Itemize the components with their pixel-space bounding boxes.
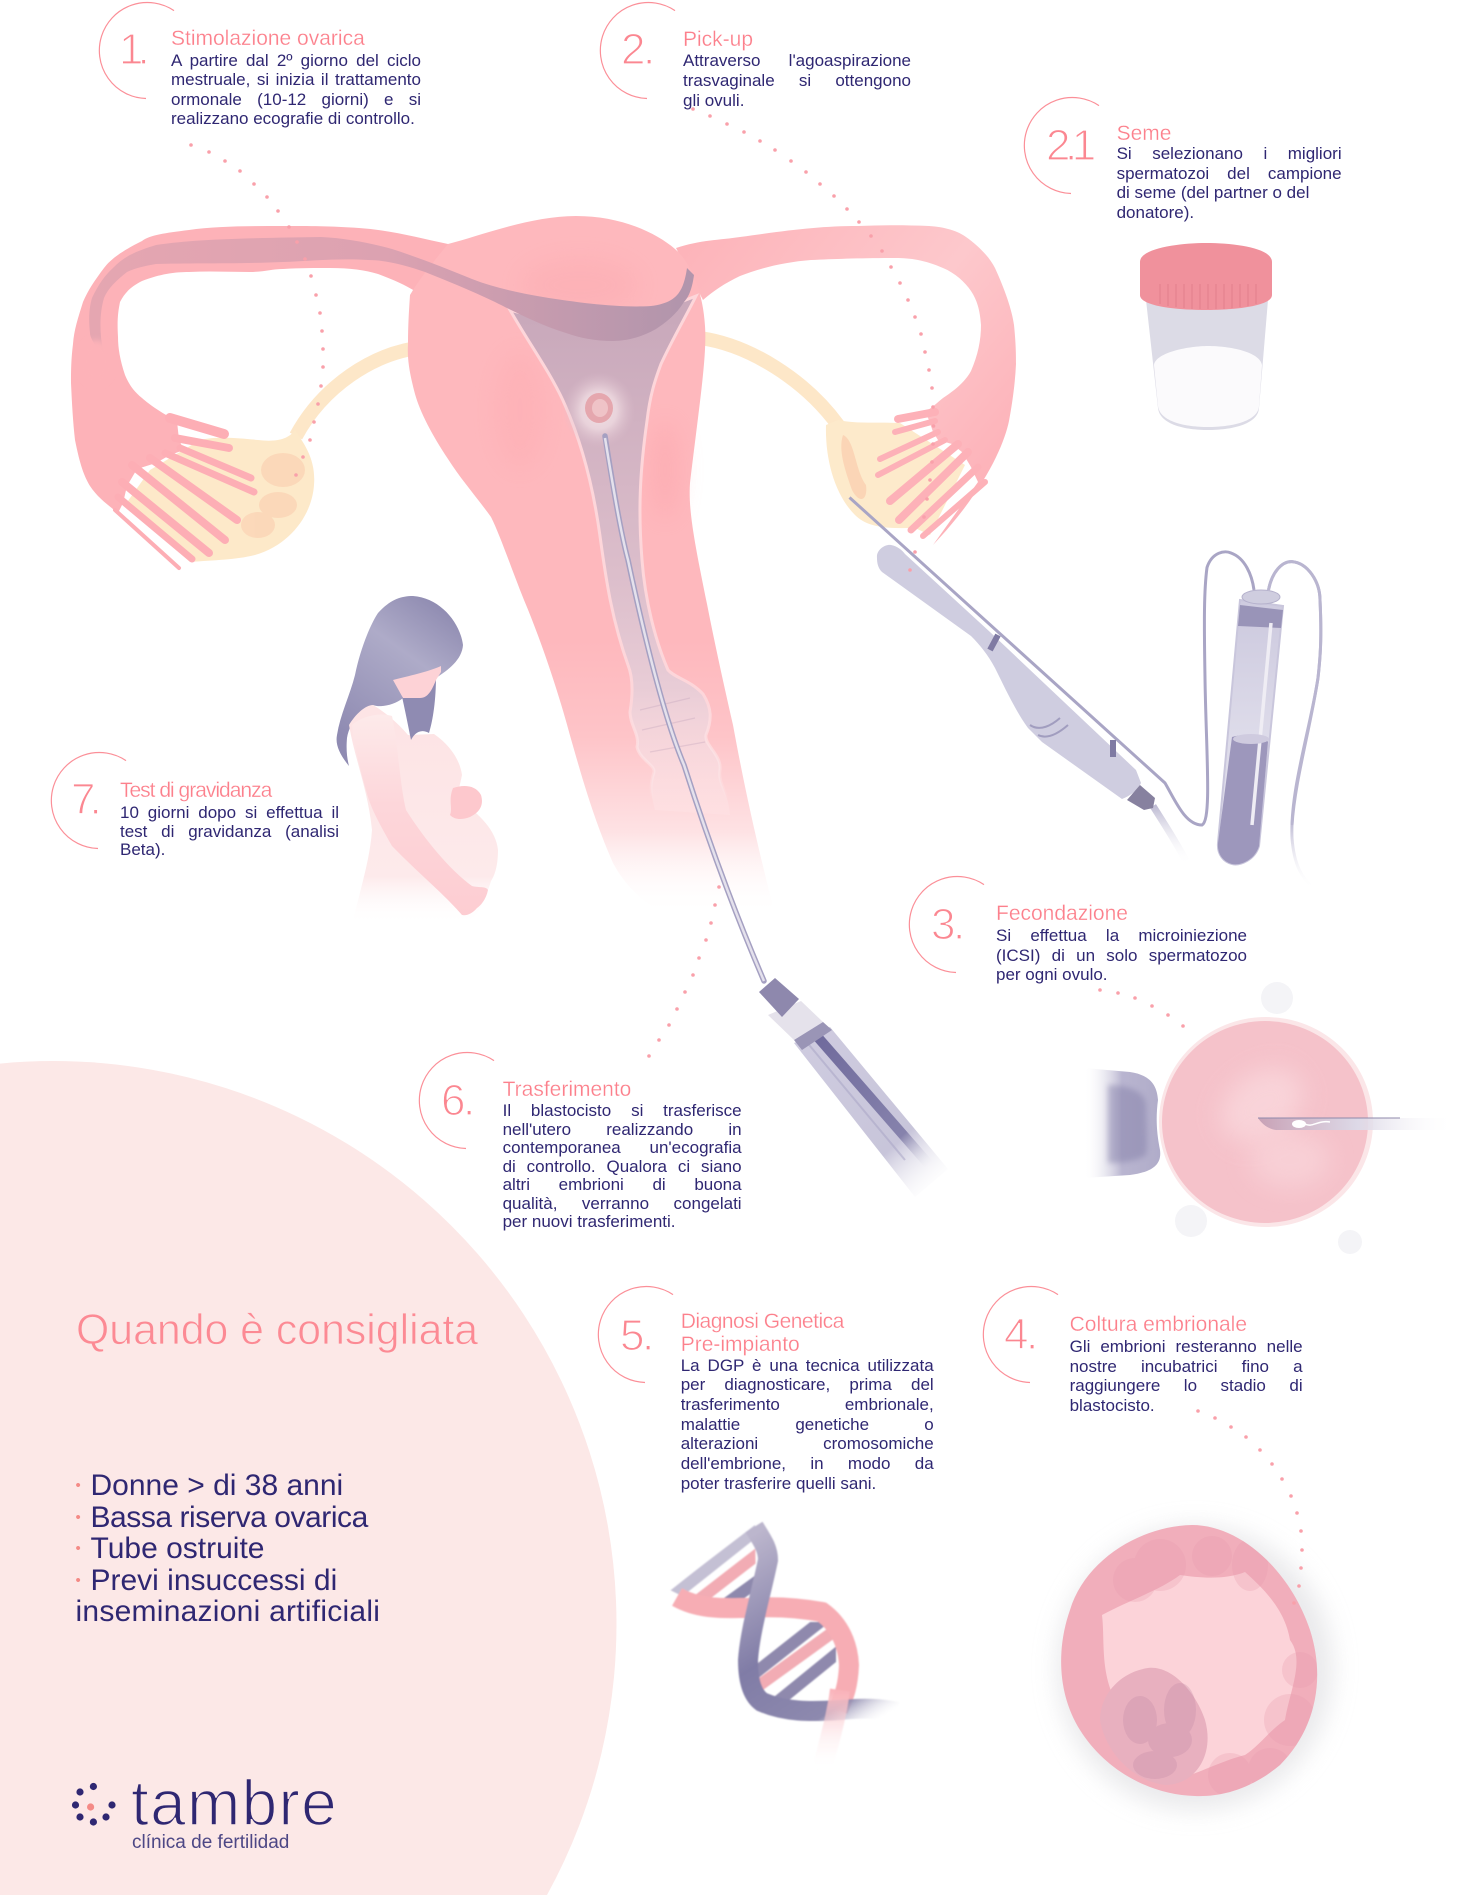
- list: indications: Previ insuccessi di: [90, 1564, 337, 1597]
- sperm: [1292, 1120, 1306, 1128]
- pink strand lower: [822, 1690, 840, 1770]
- step 5: Diagnosi Genetica Pre-impianto: per diagnosticare, prima del: [681, 1375, 934, 1394]
- step 7: Test di gravidanza: 10 giorni dopo si effettua il: [120, 803, 339, 822]
- step 6: Trasferimento: qualità, verranno congelati: [503, 1194, 742, 1213]
- embryo in uterus: [563, 372, 635, 448]
- step 2: Pick-up: 2.: [621, 25, 653, 74]
- holding pipette: [1084, 1068, 1160, 1178]
- list: indications: •: [76, 1477, 81, 1494]
- step 1: Stimolazione ovarica: ormonale (10-12 giorni) e si: [171, 90, 421, 109]
- step 5: Diagnosi Genetica Pre-impianto: Pre-impianto: [681, 1333, 800, 1356]
- heading: Quando è consigliata: Quando è consigliata: [76, 1306, 478, 1354]
- test tube: [1218, 600, 1283, 864]
- step 6: Trasferimento: Il blastocisto si trasferisce: [503, 1101, 742, 1120]
- step 4: Coltura embrionale: Coltura embrionale: [1070, 1313, 1247, 1336]
- dotted connector: step 1: [189, 143, 325, 477]
- dotted connector: step 2: [691, 107, 935, 572]
- step 5: Diagnosi Genetica Pre-impianto: 5.: [620, 1311, 652, 1360]
- step 3: Fecondazione: Si effettua la microiniezione: [996, 926, 1247, 945]
- probe clips: [990, 635, 1113, 757]
- step 5: Diagnosi Genetica Pre-impianto: [598, 1286, 934, 1493]
- purple strand: [748, 1527, 897, 1712]
- right fimbriae: [878, 412, 985, 536]
- dotted connector: step 6: [647, 885, 721, 1058]
- uterus body: [408, 216, 775, 915]
- second tube: [1268, 562, 1321, 889]
- syringe collar: [768, 1001, 823, 1040]
- step 7: Test di gravidanza: Beta).: [120, 840, 165, 859]
- list: indications: inseminazioni artificiali: [76, 1595, 380, 1628]
- lower rungs: [757, 1621, 837, 1700]
- step 1: Stimolazione ovarica: A partire dal 2º giorno del ciclo: [171, 51, 421, 70]
- step 3: Fecondazione: per ogni ovulo.: [996, 965, 1108, 984]
- left fimbriae: [115, 418, 254, 568]
- step 2.1: Seme: Si selezionano i migliori: [1117, 144, 1342, 163]
- list: indications: Donne > di 38 anni: [90, 1469, 343, 1502]
- pink strand: [677, 1597, 849, 1710]
- ovary left spots: [241, 453, 305, 538]
- step 6: Trasferimento: per nuovi trasferimenti.: [503, 1212, 676, 1231]
- list: indications: [76, 1469, 380, 1628]
- ovary right spots: [841, 435, 866, 499]
- step 4: Coltura embrionale: Gli embrioni resteranno nelle: [1070, 1337, 1303, 1356]
- step 4: Coltura embrionale: 4.: [1004, 1310, 1036, 1359]
- step 1: Stimolazione ovarica: [98, 2, 421, 128]
- illustration: DNA helix: [670, 1522, 893, 1743]
- dotted connector: step 3: [1098, 988, 1185, 1028]
- face: [393, 666, 441, 698]
- step 2.1: Seme: Seme: [1117, 122, 1171, 144]
- step 3: Fecondazione: [908, 876, 1247, 984]
- logo: tambre wordmark: tambre: [131, 1767, 338, 1839]
- cervix folds: [640, 698, 705, 752]
- step 2: Pick-up: gli ovuli.: [683, 91, 744, 110]
- list: indications: •: [76, 1509, 81, 1526]
- step 2: Pick-up: [600, 2, 911, 110]
- left tube: [71, 226, 448, 513]
- step 6: Trasferimento: contemporanea un'ecografia: [503, 1138, 742, 1157]
- inner cell mass: [1100, 1668, 1208, 1785]
- syringe plunger: [815, 1034, 932, 1168]
- step 6: Trasferimento: nell'utero realizzando in: [503, 1120, 742, 1139]
- syringe cap: [759, 978, 799, 1017]
- step 2: Pick-up: Pick-up: [683, 28, 753, 51]
- list: indications: •: [76, 1540, 81, 1557]
- step 7: Test di gravidanza: Test di gravidanza: [120, 779, 271, 802]
- step 5: Diagnosi Genetica Pre-impianto: alterazioni cromosomiche: [681, 1434, 934, 1453]
- step 4: Coltura embrionale: blastocisto.: [1070, 1396, 1155, 1414]
- step 4: Coltura embrionale: [982, 1286, 1303, 1414]
- step 7: Test di gravidanza: 7.: [71, 775, 96, 824]
- tube lumen band: [89, 237, 694, 367]
- step 4: Coltura embrionale: raggiungere lo stadio di: [1070, 1376, 1303, 1395]
- step 1: Stimolazione ovarica: mestruale, si inizia il trattamento: [171, 70, 421, 89]
- connector and cable: [1153, 806, 1186, 861]
- step 3: Fecondazione: Fecondazione: [996, 902, 1128, 925]
- logo: tambre wordmark: clínica de fertilidad: [132, 1832, 289, 1853]
- step 1: Stimolazione ovarica: Stimolazione ovarica: [171, 27, 365, 50]
- step 3: Fecondazione: (ICSI) di un solo spermatozoo: [996, 946, 1247, 964]
- hand: [450, 786, 482, 819]
- step 1: Stimolazione ovarica: realizzano ecografie di controllo.: [171, 109, 415, 128]
- right tube: [676, 225, 1016, 545]
- step 6: Trasferimento: di controllo. Qualora ci siano: [503, 1157, 742, 1176]
- step 5: Diagnosi Genetica Pre-impianto: dell'embrione, in modo da: [681, 1454, 934, 1473]
- step 5: Diagnosi Genetica Pre-impianto: La DGP è una tecnica utilizzata: [681, 1356, 934, 1375]
- band fade: [80, 340, 112, 384]
- step 2: Pick-up: trasvaginale si ottengono: [683, 71, 911, 90]
- step 1: Stimolazione ovarica: 1.: [119, 25, 144, 74]
- ovary left: [125, 430, 314, 562]
- needle tube: [850, 498, 1254, 825]
- illustration: blastocyst: [1057, 1525, 1333, 1810]
- injection needle: [1258, 1118, 1455, 1130]
- hair: [337, 596, 463, 766]
- list: indications: Tube ostruite: [90, 1532, 264, 1565]
- step 6: Trasferimento: altri embrioni di buona: [503, 1175, 742, 1194]
- hair strand: [401, 676, 436, 740]
- egg: [1159, 1017, 1373, 1227]
- ligament left: [296, 347, 425, 436]
- upper rungs: [670, 1525, 756, 1599]
- ligament right: [700, 338, 838, 425]
- step 2.1: Seme: [1024, 96, 1342, 222]
- list: indications: Bassa riserva ovarica: [90, 1501, 368, 1534]
- illustration: ICSI fertilization: [1084, 982, 1455, 1254]
- step 7: Test di gravidanza: test di gravidanza (analisi: [120, 822, 339, 841]
- step 2.1: Seme: di seme (del partner o del: [1117, 183, 1309, 202]
- step 5: Diagnosi Genetica Pre-impianto: Diagnosi Genetica: [681, 1310, 844, 1333]
- step 2.1: Seme: 2.1: [1046, 121, 1091, 170]
- step 5: Diagnosi Genetica Pre-impianto: malattie genetiche o: [681, 1415, 934, 1434]
- step 6: Trasferimento: Trasferimento: [503, 1078, 631, 1101]
- step 6: Trasferimento: [418, 1052, 742, 1231]
- rim cells: [1130, 1572, 1296, 1768]
- uterus shading: [494, 257, 679, 520]
- step 2.1: Seme: spermatozoi del campione: [1117, 164, 1342, 183]
- step 5: Diagnosi Genetica Pre-impianto: poter trasferire quelli sani.: [681, 1474, 876, 1493]
- step 2.1: Seme: donatore).: [1117, 203, 1194, 222]
- inner cavity: [1102, 1572, 1296, 1775]
- arm: [352, 714, 488, 915]
- illustration: catheter and syringe: [605, 436, 948, 1197]
- ovary right: [826, 420, 965, 535]
- body: [349, 705, 498, 925]
- step 5: Diagnosi Genetica Pre-impianto: trasferimento embrionale,: [681, 1395, 934, 1414]
- uterine cavity: [510, 296, 730, 815]
- step 3: Fecondazione: 3.: [931, 900, 963, 948]
- panel: pink background circle: [0, 1061, 616, 1895]
- bubbles: [1175, 982, 1362, 1254]
- illustration: pregnant woman: [337, 596, 498, 925]
- step 2: Pick-up: Attraverso l'agoaspirazione: [683, 51, 911, 70]
- illustration: uterus with tubes and ovaries: [71, 216, 1016, 915]
- illustration: specimen jar: [1140, 243, 1272, 430]
- list: indications: •: [76, 1572, 81, 1589]
- icon: logo dots: [72, 1783, 116, 1826]
- step 4: Coltura embrionale: nostre incubatrici fino a: [1070, 1356, 1303, 1376]
- step 7: Test di gravidanza: [50, 752, 339, 859]
- syringe body: [794, 1027, 948, 1197]
- illustration: ultrasound probe with needle: [850, 498, 1321, 889]
- step 6: Trasferimento: 6.: [441, 1076, 473, 1125]
- dotted connector: step 4: [1196, 1409, 1304, 1605]
